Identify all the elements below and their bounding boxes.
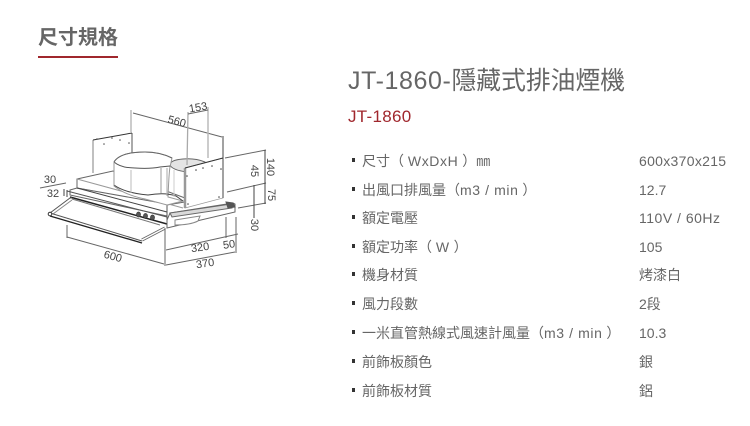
control buttons bbox=[136, 212, 154, 220]
dimension values: 140 bbox=[264, 158, 276, 176]
spec row: outlet airflow: 12.7 bbox=[639, 182, 666, 198]
spec row: outlet airflow bbox=[352, 182, 666, 198]
dimension values: 320 bbox=[190, 241, 210, 255]
spec row: panel colour: 前飾板顏色 bbox=[362, 354, 432, 370]
spec row: size bbox=[352, 153, 726, 169]
model number: JT-1860 bbox=[348, 107, 412, 126]
spec row: fan speeds: 2段 bbox=[639, 296, 661, 312]
dimension values: 600 bbox=[102, 249, 123, 265]
hood body bbox=[67, 171, 185, 228]
spec row: power: 額定功率（ W ） bbox=[362, 239, 468, 255]
dimension values bbox=[44, 100, 277, 271]
spec row: fan speeds bbox=[352, 296, 661, 312]
spec row: measured airflow: 一米直管熱線式風速計風量（m3 / min ） bbox=[362, 325, 620, 341]
left mounting bracket bbox=[93, 133, 133, 173]
spec row: measured airflow: 10.3 bbox=[639, 325, 666, 341]
dimension values: 560 bbox=[166, 114, 187, 130]
section heading: 尺寸規格 bbox=[38, 27, 118, 49]
spec row: fan speeds: 風力段數 bbox=[362, 296, 418, 312]
spec row: outlet airflow: 出風口排風量（m3 / min ） bbox=[362, 182, 536, 198]
spec row: panel material: 前飾板材質 bbox=[362, 383, 432, 399]
product title: JT-1860-隱藏式排油煙機 bbox=[348, 67, 625, 95]
dimension values: 32 bbox=[47, 188, 59, 200]
dimension values: 75 bbox=[265, 189, 277, 201]
spec row: power: 105 bbox=[639, 239, 662, 255]
spec row: panel material: 鋁 bbox=[639, 383, 653, 399]
dimension values: 50 bbox=[222, 238, 236, 252]
exhaust duct bbox=[114, 152, 205, 205]
base tray bbox=[167, 202, 235, 228]
dimension diagram bbox=[40, 100, 277, 271]
spec row: voltage bbox=[352, 210, 721, 226]
spec row: power bbox=[352, 239, 662, 255]
spec row: size: 尺寸（ WxDxH ）㎜ bbox=[362, 153, 490, 169]
spec row: panel colour: 銀 bbox=[639, 354, 653, 370]
spec row: voltage: 110V / 60Hz bbox=[639, 210, 721, 226]
spec row: panel colour bbox=[352, 354, 653, 370]
heading underline bbox=[38, 56, 118, 58]
dimension values: 153 bbox=[188, 100, 208, 115]
specification list bbox=[352, 153, 726, 399]
pull-out visor bbox=[48, 198, 165, 243]
right mounting bracket bbox=[185, 158, 223, 208]
spec row: panel material bbox=[352, 383, 653, 399]
dimension values: 30 bbox=[248, 219, 260, 231]
dimension lines bbox=[40, 107, 266, 266]
dimension values: 370 bbox=[195, 257, 215, 271]
spec row: body material bbox=[352, 267, 681, 283]
dimension values: 30 bbox=[44, 174, 56, 186]
dimension values: 45 bbox=[248, 165, 260, 177]
spec row: body material: 機身材質 bbox=[362, 267, 418, 283]
spec row: size: 600x370x215 bbox=[639, 153, 726, 169]
spec row: body material: 烤漆白 bbox=[639, 267, 681, 283]
spec row: voltage: 額定電壓 bbox=[362, 210, 418, 226]
